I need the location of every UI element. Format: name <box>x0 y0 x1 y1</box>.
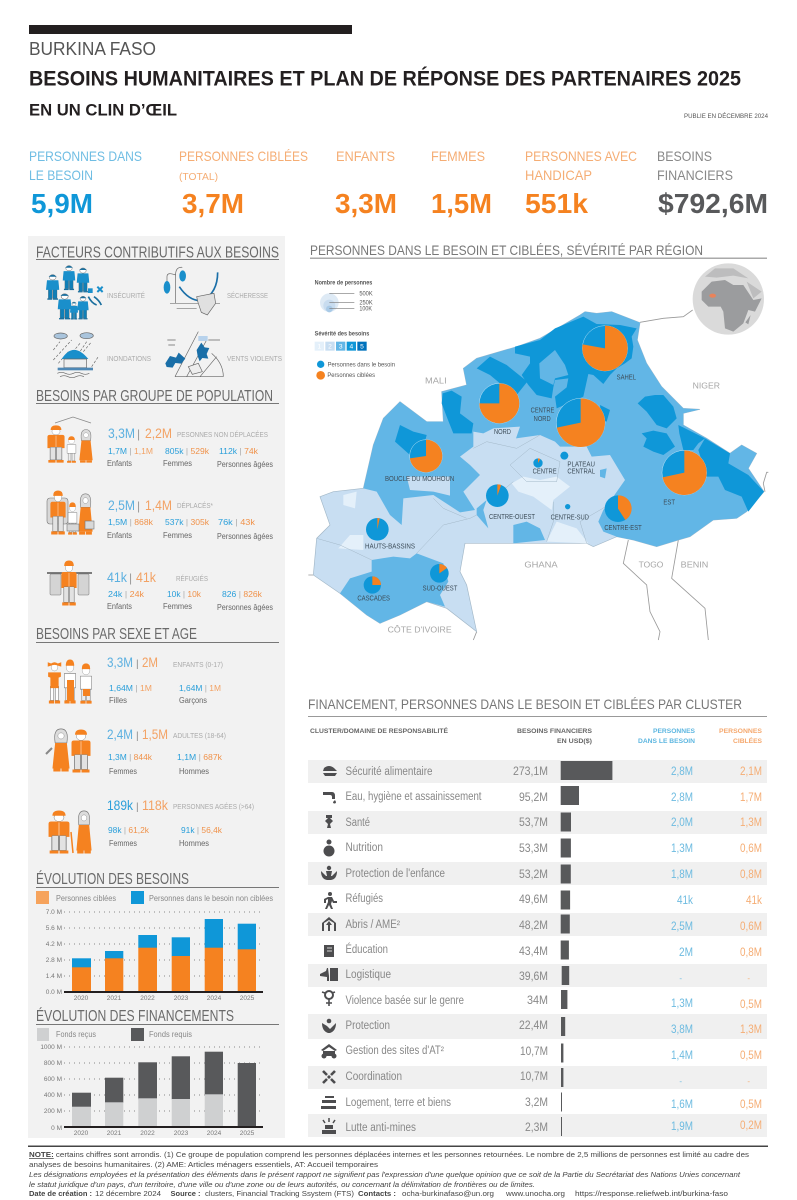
group: children: Garçons <box>179 696 207 705</box>
neighbouring country labels: NIGER <box>693 381 720 390</box>
pie: Nord <box>479 383 519 423</box>
row: Gestion des sites: 1,4M <box>671 1050 693 1062</box>
group: children: Filles <box>109 696 127 705</box>
row: Eau, hygiène et assainissement: 95,2M <box>519 792 548 804</box>
country name: BURKINA FASO <box>29 39 156 59</box>
row: Coordination: Coordination <box>346 1071 402 1083</box>
panel: needs by sex and age <box>36 626 279 854</box>
group: non-displaced people: 805k | 529k <box>165 446 210 456</box>
footer notes: Source : <box>170 1189 200 1198</box>
group: children: 2M <box>142 654 158 670</box>
icon: insecurity <box>46 266 103 319</box>
chart: evolution of needs: 2020 <box>74 995 89 1002</box>
group: non-displaced people: 2,2M <box>145 425 172 441</box>
figure: children: 3,3M <box>335 188 397 219</box>
severity 3: south-west <box>340 553 448 623</box>
row: Éducation: 43,4M <box>519 946 548 958</box>
neighbouring country labels <box>388 377 720 634</box>
table column headers: BESOINS FINANCIERS <box>517 728 593 735</box>
pie: Centre-Est <box>605 495 632 522</box>
chart: evolution of needs: 5.6 M <box>46 925 62 932</box>
row: Protection de l'enfance <box>321 864 762 884</box>
icon: drought <box>164 267 220 315</box>
row: Violence basée sur le genre: Violence basée sur le genre <box>346 995 464 1007</box>
panel: contributing factors: FACTEURS CONTRIBUTIFS AUX BESOINS <box>36 244 279 262</box>
row: Réfugiés: 41k <box>746 895 762 907</box>
footer notes: Contacts : <box>358 1189 396 1198</box>
row: Sécurité alimentaire: 2,1M <box>740 766 762 778</box>
map legend: 2 <box>328 344 332 351</box>
row: Santé <box>325 812 762 832</box>
region labels: CENTRE-SUD <box>551 514 589 521</box>
chart: evolution of funding: 2025 <box>240 1130 255 1137</box>
row: Lutte anti-mines <box>322 1117 762 1136</box>
group: adults: 1,1M | 687k <box>177 752 223 762</box>
group: refugees: 826 | 826k <box>222 589 263 599</box>
map legend <box>315 280 395 380</box>
table column headers: PERSONNES <box>719 728 763 735</box>
row: Santé: Santé <box>346 817 370 829</box>
footer notes: NOTE: certains chiffres sont arrondis. (1) Ce groupe de population comprend les personnes déplacées internes et les personnes retournées. Le nombre de 2,5 millions de personnes est limité au cadre des <box>29 1150 749 1159</box>
row: Protection: 3,8M <box>671 1024 693 1036</box>
row: Eau, hygiène et assainissement: 2,8M <box>671 792 693 804</box>
group: non-displaced people: | <box>137 427 140 441</box>
severity 1 and 2 patches <box>338 477 588 550</box>
group: adults: Hommes <box>179 767 209 776</box>
group: non-displaced people: Personnes âgées <box>217 460 273 469</box>
subtitle: EN UN CLIN D’ŒIL <box>29 100 177 120</box>
row: Santé: 53,7M <box>519 817 548 829</box>
row: Protection de l'enfance: Protection de l'enfance <box>346 868 445 880</box>
chart: evolution of funding: 600 M <box>44 1076 62 1083</box>
figure: targeted people <box>179 148 308 219</box>
row: Réfugiés: Réfugiés <box>346 893 383 905</box>
pie: small marker north <box>620 327 625 333</box>
table column headers: EN USD($) <box>557 738 592 745</box>
group: non-displaced people: PESONNES NON DÉPLACÉES <box>177 430 268 439</box>
group: refugees: | <box>129 571 132 585</box>
row: Nutrition: 0,6M <box>740 843 762 855</box>
row: Protection: 1,3M <box>740 1024 762 1036</box>
main title: BESOINS HUMANITAIRES ET PLAN DE RÉPONSE DES PARTENAIRES 2025 <box>29 68 741 90</box>
row: Logement, terre et biens: 0,5M <box>740 1099 762 1111</box>
group: refugees: Enfants <box>107 602 132 611</box>
footer notes: www.unocha.org <box>505 1189 565 1198</box>
row: Protection: 22,4M <box>519 1020 548 1032</box>
chart: evolution of funding: ÉVOLUTION DES FINANCEMENTS <box>36 1008 234 1025</box>
footer notes: https://response.reliefweb.int/burkina-faso <box>575 1189 728 1198</box>
row: Abris / AME: 0,6M <box>740 921 762 933</box>
footer notes: analyses de besoins humanitaires. (2) AME: Articles ménagers essentiels, AT: Accueil temporaires <box>29 1160 378 1169</box>
publication date: PUBLIE EN DÉCEMBRE 2024 <box>684 113 769 120</box>
row: Abris / AME: 48,2M <box>519 920 548 932</box>
row: Protection <box>322 1017 762 1036</box>
map legend: 5 <box>360 344 364 351</box>
icon: violent winds <box>165 332 223 377</box>
table column headers: DANS LE BESOIN <box>638 738 695 745</box>
severity 3: north and east <box>363 312 764 547</box>
figure: targeted people: (TOTAL) <box>179 172 218 183</box>
row: Violence basée sur le genre: 0,5M <box>740 999 762 1011</box>
pie: Hauts-Bassins <box>366 518 389 541</box>
row: Logement, terre et biens: 1,6M <box>671 1099 693 1111</box>
region labels: PLATEAU <box>567 461 595 468</box>
row: Logement, terre et biens: 3,2M <box>525 1097 548 1109</box>
footer notes: ocha-burkinafaso@un.org <box>402 1189 494 1198</box>
chart: evolution of needs: ÉVOLUTION DES BESOINS <box>36 871 189 888</box>
group: children: 1,64M | 1M <box>109 683 152 693</box>
footer notes: clusters, Financial Tracking Ssystem (FTS) <box>205 1189 355 1198</box>
region labels: SAHEL <box>617 374 636 381</box>
row: Logistique: Logistique <box>346 969 391 981</box>
pie: Plateau Central <box>560 452 568 460</box>
region labels: BOUCLE DU MOUHOUN <box>385 476 454 483</box>
pie: Centre-Nord <box>556 398 605 447</box>
group: adults: | <box>136 731 139 742</box>
row: Coordination: - <box>747 1077 750 1086</box>
group: children: | <box>136 659 139 670</box>
chart: evolution of needs: Personnes dans le besoin non ciblées <box>149 893 273 903</box>
globe locator <box>693 263 764 335</box>
row: Gestion des sites <box>321 1044 762 1062</box>
key figures <box>29 148 768 219</box>
map legend: Sévérité des besoins <box>315 332 370 338</box>
pie: Est <box>662 450 707 495</box>
row: Logement, terre et biens <box>321 1092 762 1112</box>
region labels: HAUTS-BASSINS <box>365 543 415 550</box>
row: Protection: Protection <box>346 1020 390 1032</box>
figure: people in need: 5,9M <box>31 188 93 219</box>
label: insecurity: INSÉCURITÉ <box>107 291 145 300</box>
group: adults: 1,5M <box>142 726 168 742</box>
icon: floods <box>53 333 98 378</box>
map legend: 500K <box>359 291 373 297</box>
row: Réfugiés: 49,6M <box>519 894 548 906</box>
neighbouring country labels: TOGO <box>639 561 663 570</box>
footer notes <box>28 1146 768 1198</box>
group: older persons: Femmes <box>109 839 137 848</box>
table column headers: PERSONNES <box>653 728 696 735</box>
group: displaced people: Enfants <box>107 531 132 540</box>
row: Gestion des sites: 0,5M <box>740 1050 762 1062</box>
footer notes: le statut juridique d'un pays, d'un territoire, d'une ville ou d'une zone ou de leurs autorités, ou concernant la délimitation de frontières ou de limites. <box>29 1180 535 1189</box>
region labels: EST <box>663 499 676 506</box>
row: Logistique: - <box>747 974 750 983</box>
chart: evolution of funding: 1000 M <box>40 1044 62 1051</box>
row: Lutte anti-mines: Lutte anti-mines <box>346 1122 416 1134</box>
figure: people in need: PERSONNES DANS <box>29 148 142 164</box>
row: Abris / AME: Abris / AME² <box>346 919 400 931</box>
row: Eau, hygiène et assainissement: Eau, hygiène et assainissement <box>346 791 482 803</box>
row: Sécurité alimentaire: 2,8M <box>671 766 693 778</box>
group: older persons <box>49 797 254 854</box>
pie: Centre-Ouest <box>486 484 509 507</box>
pie: Cascades <box>364 576 381 594</box>
group: older persons: 98k | 61,2k <box>108 825 150 835</box>
footer notes: Date de création : <box>29 1189 92 1198</box>
map: severity by region <box>308 263 768 640</box>
panel: contributing factors <box>36 244 282 378</box>
chart: evolution of funding: 0 M <box>51 1125 62 1132</box>
row: Logistique: - <box>679 974 682 983</box>
row: Abris / AME <box>322 914 762 934</box>
row: Réfugiés: 41k <box>677 895 693 907</box>
row: Logistique: 39,6M <box>519 971 548 983</box>
group: older persons: 189k <box>107 797 134 813</box>
region labels: NORD <box>534 416 551 423</box>
row: Gestion des sites: Gestion des sites d'AT² <box>346 1045 444 1057</box>
chart: evolution of needs: 0.0 M <box>46 989 62 996</box>
chart: evolution of funding <box>36 1008 279 1137</box>
map section heading: PERSONNES DANS LE BESOIN ET CIBLÉES, SÉVÉRITÉ PAR RÉGION <box>310 242 703 258</box>
group: displaced people: 537k | 305k <box>165 517 210 527</box>
row: Éducation: 2M <box>679 947 693 959</box>
group: refugees: 41k <box>136 569 157 585</box>
row: Coordination: - <box>679 1077 682 1086</box>
table: clusters <box>320 761 762 1136</box>
group: older persons: PERSONNES AGÉES (>64) <box>173 802 254 811</box>
map legend: Nombre de personnes <box>315 280 373 286</box>
row: Protection de l'enfance: 0,8M <box>740 869 762 881</box>
row: Nutrition: 53,3M <box>519 843 548 855</box>
group: children: 1,64M | 1M <box>179 683 221 693</box>
row: Logement, terre et biens: Logement, terre et biens <box>346 1097 451 1109</box>
row: Éducation: Éducation <box>346 943 388 956</box>
chart: evolution of needs: 2025 <box>240 995 255 1002</box>
row: Protection de l'enfance: 1,8M <box>671 869 693 881</box>
group: displaced people: Femmes <box>163 531 192 540</box>
row: Violence basée sur le genre <box>322 990 762 1011</box>
chart: evolution of funding: 400 M <box>44 1092 62 1099</box>
footer notes: 12 décembre 2024 <box>95 1189 161 1198</box>
group: displaced people: Personnes âgées <box>217 532 273 541</box>
table column headers <box>310 726 763 745</box>
chart: evolution of needs <box>36 871 279 1002</box>
group: refugees <box>47 560 273 612</box>
figure: financial needs <box>657 148 768 219</box>
country base: light severity <box>313 312 764 632</box>
group: children: 3,3M <box>107 654 133 670</box>
pie: Centre <box>533 458 543 468</box>
row: Nutrition: 1,3M <box>671 843 693 855</box>
figure: people with disability <box>525 148 637 219</box>
label: floods: INONDATIONS <box>107 356 151 363</box>
group: older persons: | <box>136 802 139 813</box>
region labels: CENTRE <box>533 468 557 475</box>
chart: evolution of needs: 7.0 M <box>46 909 62 916</box>
chart: evolution of funding: 2022 <box>140 1130 155 1137</box>
group: refugees: 41k <box>107 569 128 585</box>
row: Violence basée sur le genre: 34M <box>527 995 548 1007</box>
group: adults: ADULTES (18-64) <box>173 733 226 740</box>
region labels <box>357 374 676 603</box>
panel: needs by sex and age: BESOINS PAR SEXE ET AGE <box>36 626 197 643</box>
figure: women: FEMMES <box>431 148 485 164</box>
severity 3: small patches <box>477 468 633 543</box>
figure: financial needs: BESOINS <box>657 148 712 164</box>
group: older persons: 118k <box>142 797 169 813</box>
neighbouring country labels: CÔTE D'IVOIRE <box>388 625 452 634</box>
group: refugees: Personnes âgées <box>217 603 273 612</box>
row: Coordination: 10,7M <box>520 1071 548 1083</box>
row: Réfugiés <box>324 890 762 910</box>
chart: evolution of needs: 2023 <box>174 995 189 1002</box>
group: displaced people <box>47 490 273 541</box>
region labels: CENTRE-OUEST <box>489 514 536 521</box>
row: Sécurité alimentaire: 273,1M <box>513 766 548 778</box>
row: Coordination <box>323 1068 750 1087</box>
row: Protection de l'enfance: 53,2M <box>519 869 548 881</box>
group: non-displaced people: 1,7M | 1,1M <box>108 446 153 456</box>
region labels: CENTRAL <box>567 469 595 476</box>
row: Sécurité alimentaire <box>323 761 762 780</box>
group: older persons: 91k | 56,4k <box>181 825 223 835</box>
panel: needs by population group: BESOINS PAR GROUPE DE POPULATION <box>36 388 273 405</box>
map legend: 4 <box>349 344 353 351</box>
row: Nutrition: Nutrition <box>346 842 383 854</box>
panel: left column background <box>28 236 285 1138</box>
figure: people in need: LE BESOIN <box>29 167 93 183</box>
figure: children: ENFANTS <box>336 148 395 164</box>
group: non-displaced people <box>47 417 273 469</box>
row: Nutrition <box>324 838 762 858</box>
group: displaced people: 76k | 43k <box>218 517 256 527</box>
figure: people in need <box>29 148 142 219</box>
label: violent winds: VENTS VIOLENTS <box>227 356 282 363</box>
row: Éducation <box>324 940 762 960</box>
map legend: Personnes ciblées <box>327 373 375 379</box>
group: displaced people: 1,5M | 868k <box>108 517 154 527</box>
group: displaced people: 2,5M <box>108 497 135 513</box>
chart: evolution of needs: 2024 <box>207 995 222 1002</box>
region labels: CENTRE-EST <box>604 525 642 532</box>
map legend: 1 <box>317 344 321 351</box>
figure: people with disability: PERSONNES AVEC <box>525 148 637 164</box>
row: Eau, hygiène et assainissement: 1,7M <box>740 792 762 804</box>
chart: evolution of funding: 2024 <box>207 1130 222 1137</box>
group: adults: 1,3M | 844k <box>108 752 153 762</box>
figure: financial needs: FINANCIERS <box>657 167 733 183</box>
row: Abris / AME: 2,5M <box>671 921 693 933</box>
row: Santé: 1,3M <box>740 817 762 829</box>
group: children: ENFANTS (0-17) <box>173 662 223 669</box>
row: Eau, hygiène et assainissement <box>323 786 762 805</box>
chart: evolution of needs: 4.2 M <box>46 941 62 948</box>
group: displaced people: 1,4M <box>145 497 172 513</box>
table row stripes <box>308 760 767 1137</box>
group: displaced people: | <box>137 499 140 513</box>
chart: evolution of funding: Fonds requis <box>149 1029 192 1039</box>
cluster table heading: FINANCEMENT, PERSONNES DANS LE BESOIN ET CIBLÉES PAR CLUSTER <box>308 696 742 712</box>
group: refugees: 10k | 10k <box>167 589 202 599</box>
group: non-displaced people: 3,3M <box>108 425 135 441</box>
row: Lutte anti-mines: 0,2M <box>740 1120 762 1132</box>
map legend: Personnes dans le besoin <box>328 362 395 368</box>
group: refugees: Femmes <box>163 602 192 611</box>
group: non-displaced people: Femmes <box>163 459 192 468</box>
row: Santé: 2,0M <box>671 817 693 829</box>
severity 4 patches <box>395 317 764 512</box>
map legend: 100K <box>359 306 372 312</box>
group: non-displaced people: 112k | 74k <box>219 446 259 456</box>
region labels: CASCADES <box>357 596 390 603</box>
region labels: SUD-OUEST <box>423 585 458 592</box>
pie: Boucle du Mouhoun <box>410 440 442 472</box>
chart: evolution of funding: 2020 <box>74 1130 89 1137</box>
row: Gestion des sites: 10,7M <box>520 1046 548 1058</box>
chart: evolution of funding: 2023 <box>174 1130 189 1137</box>
neighbouring country labels: MALI <box>425 377 447 386</box>
row: Lutte anti-mines: 1,9M <box>671 1121 693 1133</box>
row: Violence basée sur le genre: 1,3M <box>671 998 693 1010</box>
chart: evolution of funding: 200 M <box>44 1108 62 1115</box>
pie: Sud-Ouest <box>430 564 449 583</box>
table column headers: CIBLÉES <box>733 736 763 745</box>
row: Éducation: 0,8M <box>740 947 762 959</box>
chart: evolution of needs: 2021 <box>107 995 122 1002</box>
group: older persons: Hommes <box>179 839 209 848</box>
neighbouring country labels: BENIN <box>681 561 709 570</box>
title block <box>29 25 769 120</box>
region labels: CENTRE <box>531 408 555 415</box>
figure: people with disability: 551k <box>525 188 588 219</box>
neighbouring country labels: GHANA <box>524 561 558 570</box>
map legend: 3 <box>339 344 343 351</box>
figure: financial needs: $792,6M <box>658 188 768 219</box>
row: Lutte anti-mines: 2,3M <box>525 1122 548 1134</box>
chart: evolution of funding: 800 M <box>44 1060 62 1067</box>
group: displaced people: DÉPLACÉS* <box>177 501 213 510</box>
table column headers: CLUSTER/DOMAINE DE RESPONSABILITÉ <box>310 726 449 735</box>
figure: people with disability: HANDICAP <box>525 167 592 183</box>
pie: Centre-Sud <box>565 504 570 509</box>
figure: targeted people: 3,7M <box>182 188 244 219</box>
group: adults: Femmes <box>109 767 137 776</box>
chart: evolution of needs: 2022 <box>140 995 155 1002</box>
figure: women <box>431 148 492 219</box>
chart: evolution of needs: 2.8 M <box>46 957 62 964</box>
chart: evolution of funding: 2021 <box>107 1130 122 1137</box>
group: refugees: RÉFUGIÉS <box>176 574 208 583</box>
group: adults <box>46 726 226 776</box>
group: children <box>48 654 223 705</box>
region labels: NORD <box>494 429 511 436</box>
panel: needs by population group <box>36 388 279 612</box>
chart: evolution of needs: Personnes ciblées <box>56 893 116 903</box>
figure: targeted people: PERSONNES CIBLÉES <box>179 148 308 164</box>
row: Logistique <box>320 966 750 985</box>
pie: Sahel <box>582 326 628 371</box>
neighbouring borders <box>308 310 768 640</box>
chart: evolution of needs: 1.4 M <box>46 973 62 980</box>
label: drought: SÉCHERESSE <box>227 291 268 300</box>
group: adults: 2,4M <box>107 726 133 742</box>
map legend: 250K <box>359 300 373 306</box>
footer notes: Les désignations employées et la présentation des éléments dans le présent rapport ne signifient pas l'expression d'une quelque opinion que ce soit de la Partie du Secrétariat des Nations Unies concernant <box>29 1170 741 1179</box>
chart: evolution of funding: Fonds reçus <box>56 1029 96 1039</box>
figure: children <box>335 148 397 219</box>
group: non-displaced people: Enfants <box>107 459 132 468</box>
group: refugees: 24k | 24k <box>108 589 145 599</box>
row: Sécurité alimentaire: Sécurité alimentaire <box>346 766 432 778</box>
figure: women: 1,5M <box>431 188 492 219</box>
